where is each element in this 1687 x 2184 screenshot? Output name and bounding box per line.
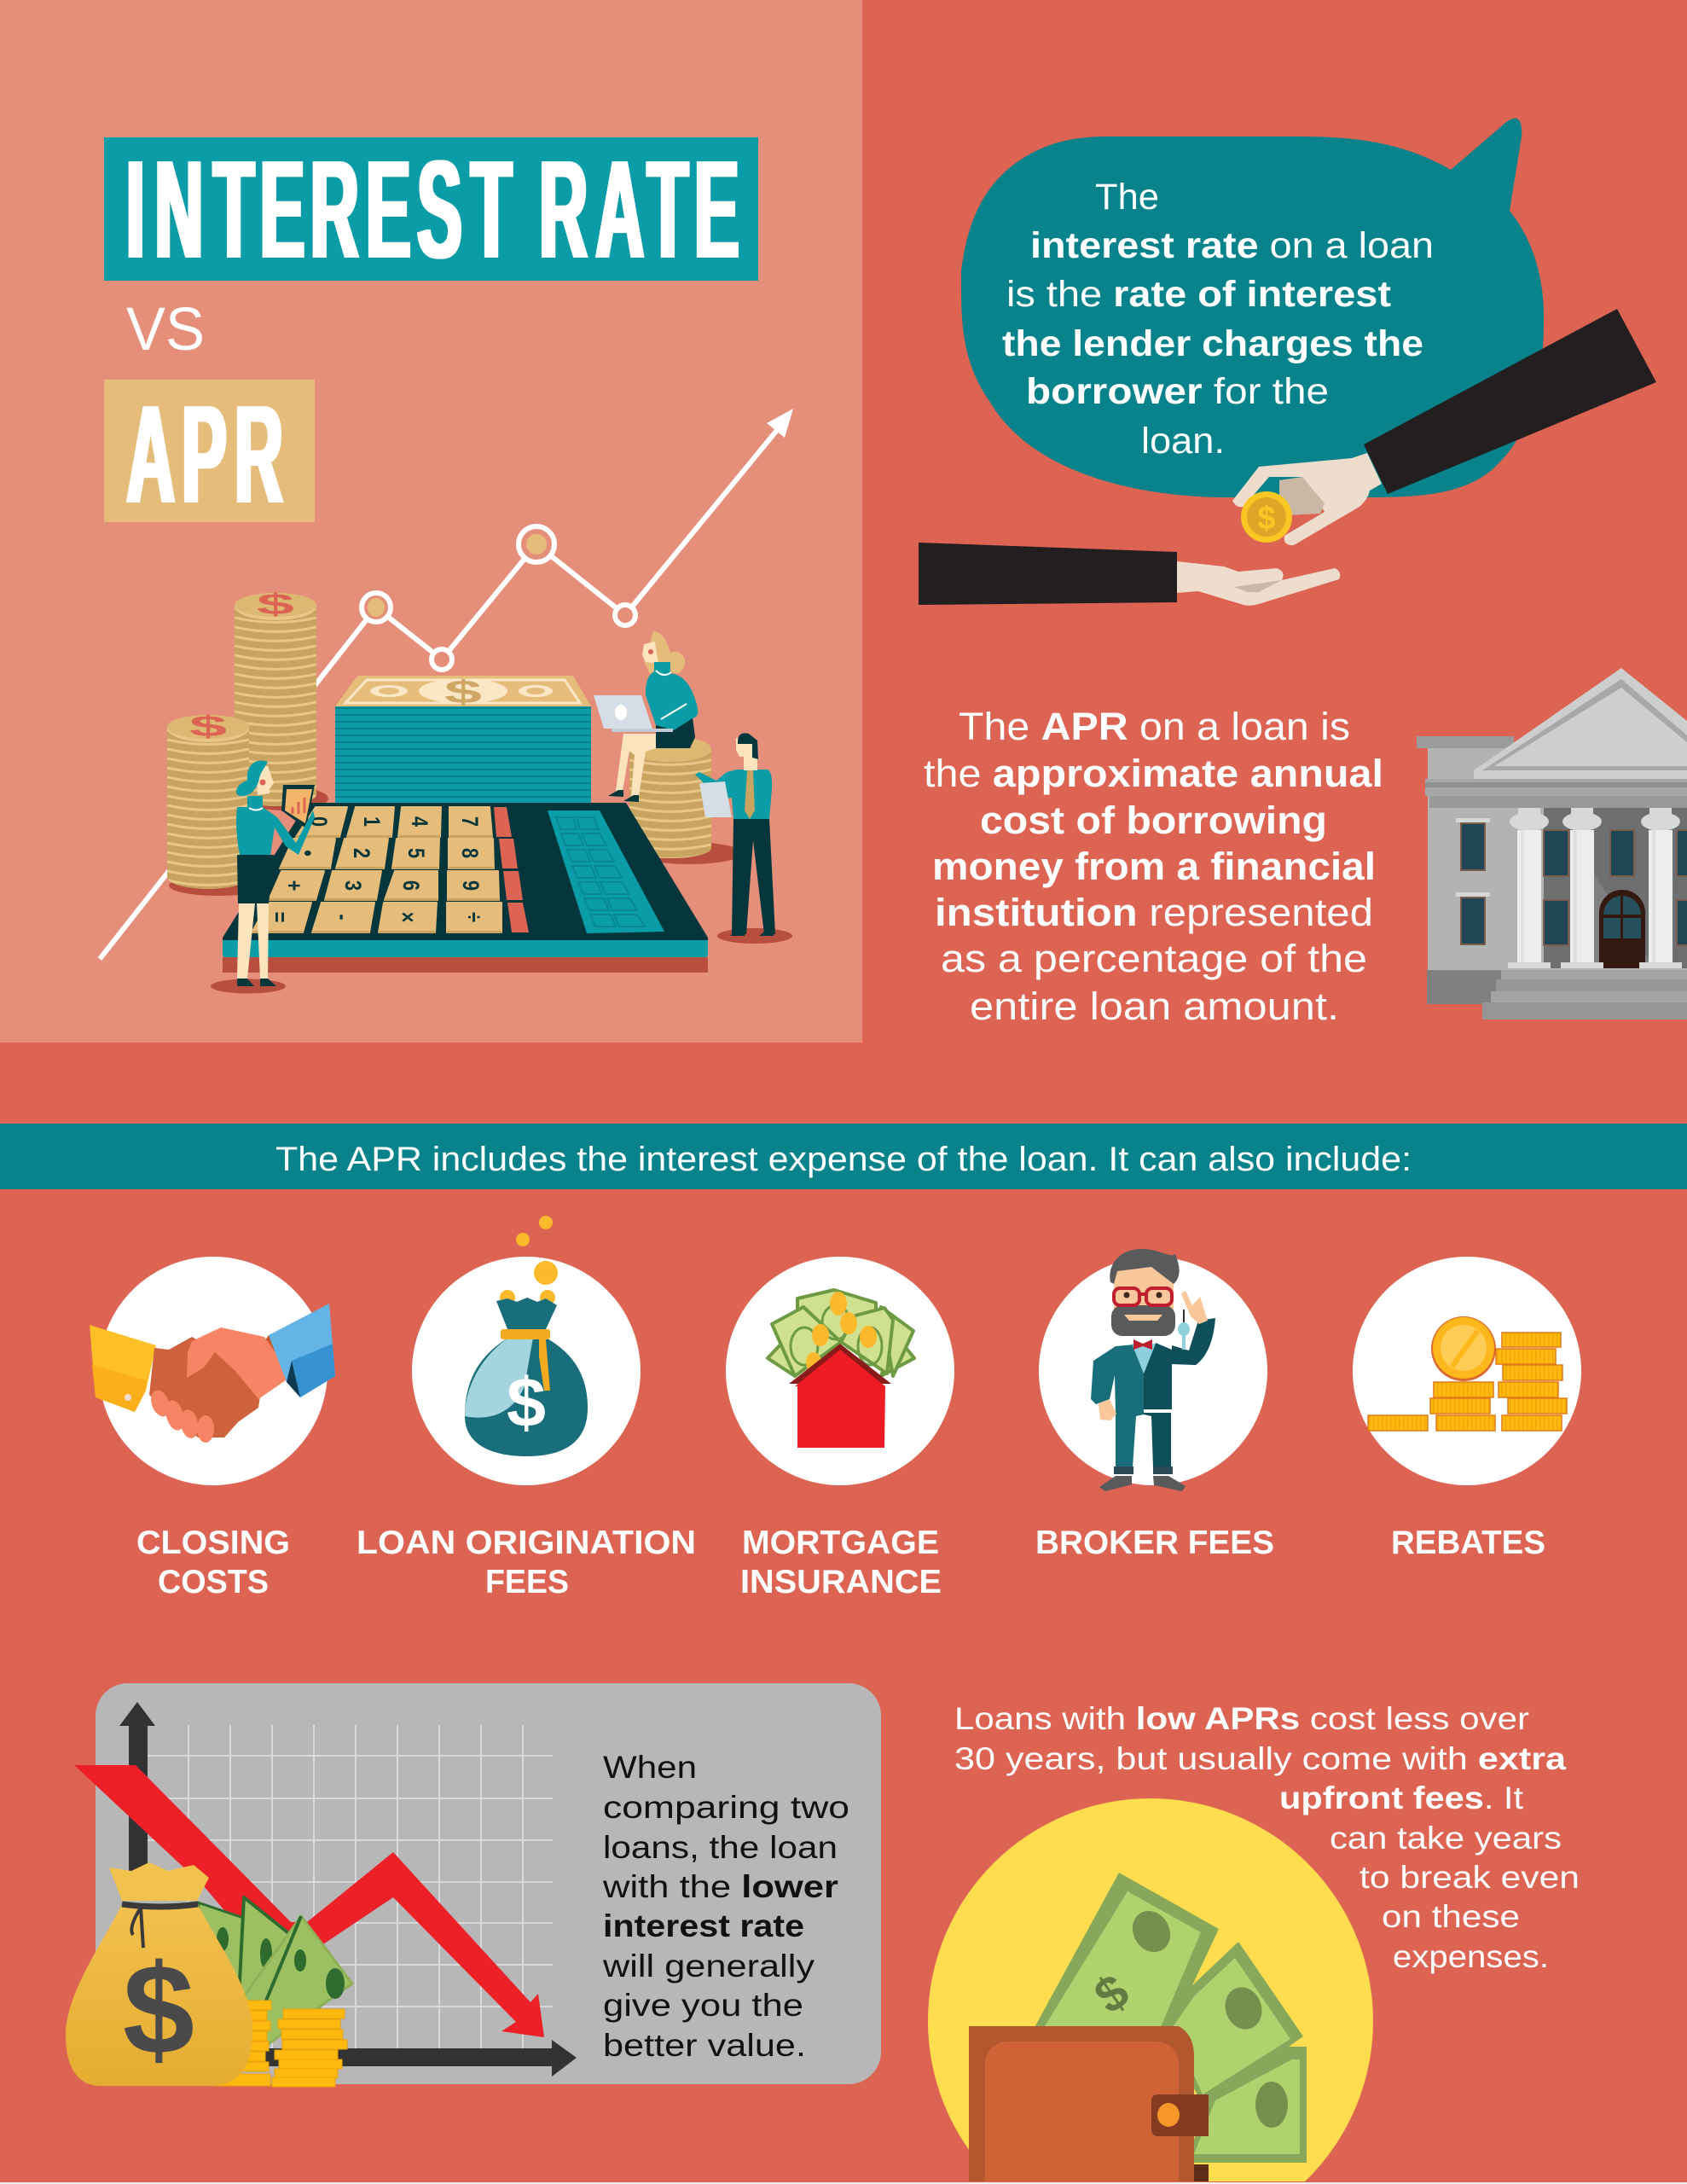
chart axes bbox=[119, 1702, 577, 2077]
title: interest rate: INTEREST RATE bbox=[126, 132, 739, 288]
calculator key labels: 9 bbox=[457, 880, 483, 891]
calculator screen bbox=[548, 810, 664, 933]
text: low aprs: to break even bbox=[1359, 1860, 1580, 1895]
text: interest rate definition: the lender charges the bbox=[1002, 323, 1423, 364]
speech bubble bbox=[961, 119, 1544, 497]
coin stack: tall bbox=[235, 589, 328, 810]
calculator key labels: 4 bbox=[406, 816, 432, 827]
calculator function keys bbox=[494, 807, 529, 932]
calculator key labels: 8 bbox=[456, 848, 482, 858]
person: man with tablet bbox=[695, 733, 792, 944]
icon: handshake bbox=[90, 1304, 335, 1443]
coin stack: short bbox=[167, 711, 268, 896]
illustration: wallet with cash bbox=[928, 1798, 1373, 2184]
bank columns bbox=[1508, 808, 1682, 968]
text: interest rate definition: interest rate on a loan bbox=[1030, 225, 1434, 266]
text: low aprs: upfront fees . It bbox=[1279, 1780, 1524, 1815]
panel: title and illustration bbox=[0, 0, 862, 1043]
label bbox=[740, 1525, 942, 1600]
cash: second bill bbox=[1174, 1942, 1303, 2095]
calculator key labels: • bbox=[294, 850, 320, 857]
text: comparing loans: loans, the loan bbox=[603, 1830, 838, 1865]
title: vs: VS bbox=[126, 296, 205, 363]
text: apr definition: entire loan amount. bbox=[970, 985, 1339, 1028]
stack of bank notes bbox=[335, 675, 591, 804]
label: REBATES bbox=[1391, 1525, 1545, 1561]
coin bbox=[1241, 491, 1292, 543]
calculator key labels: 7 bbox=[456, 816, 482, 827]
text: comparing loans: will generally bbox=[602, 1949, 815, 1984]
coin: $ bbox=[1257, 501, 1276, 537]
text: apr definition: institution represented bbox=[935, 891, 1373, 934]
item: loan origination fees bbox=[357, 1216, 696, 1600]
tablet bbox=[281, 785, 315, 828]
calculator bbox=[223, 803, 708, 973]
text: comparing loans bbox=[602, 1750, 849, 2063]
bank door bbox=[1599, 890, 1645, 968]
text: low aprs: can take years bbox=[1330, 1821, 1562, 1856]
icon: house with money bbox=[768, 1290, 914, 1448]
calculator key labels: + bbox=[281, 880, 306, 891]
icon: money bag: $ bbox=[507, 1364, 546, 1442]
text: interest rate definition: borrower for the bbox=[1026, 371, 1329, 412]
icon: gold money bag: $ bbox=[123, 1937, 194, 2081]
cash: front bill bbox=[1035, 1873, 1219, 2026]
text: apr definition: as a percentage of the bbox=[941, 937, 1367, 980]
label: MORTGAGE bbox=[742, 1525, 939, 1561]
chart grid bbox=[147, 1725, 553, 2048]
calculator key labels: 2 bbox=[348, 848, 374, 858]
left sleeve bbox=[919, 543, 1177, 605]
icon: fan of bills bbox=[198, 1897, 352, 2048]
giving hand bbox=[1232, 453, 1382, 545]
calculator key labels bbox=[266, 816, 486, 922]
laptop bbox=[594, 695, 673, 732]
text: low aprs bbox=[954, 1701, 1580, 1974]
icon: money bag bbox=[465, 1216, 588, 1456]
calculator key labels: 6 bbox=[397, 880, 423, 891]
band: apr includes: The APR includes the interest expense of the loan. It can also include: bbox=[275, 1141, 1412, 1178]
coin stack: short: $ bbox=[189, 711, 227, 743]
calculator keys bbox=[252, 807, 501, 932]
chart falling arrow bbox=[74, 1765, 544, 2037]
coin stack: right bbox=[629, 736, 742, 864]
illustration: bank building bbox=[1417, 668, 1687, 1019]
text: low aprs: 30 years, but usually come with extra bbox=[954, 1741, 1566, 1776]
item: closing costs bbox=[90, 1257, 335, 1600]
panel: comparing two loans bbox=[66, 1683, 881, 2087]
label: INSURANCE bbox=[740, 1564, 942, 1600]
label: FEES bbox=[485, 1564, 569, 1600]
icon: broker with key bbox=[1091, 1249, 1215, 1491]
label bbox=[136, 1525, 290, 1600]
text: interest rate definition bbox=[1002, 177, 1434, 462]
text: interest rate definition: loan. bbox=[1141, 421, 1225, 462]
line chart arrow bbox=[100, 409, 793, 959]
band: apr includes bbox=[0, 1124, 1687, 1189]
calculator key labels: 5 bbox=[403, 848, 428, 858]
bank windows bbox=[1461, 823, 1687, 945]
cash: third bill bbox=[1189, 2047, 1307, 2163]
calculator key labels: - bbox=[329, 914, 355, 921]
text: comparing loans: interest rate bbox=[603, 1908, 804, 1943]
label: COSTS bbox=[158, 1564, 269, 1600]
calculator key shadows bbox=[252, 835, 501, 933]
text: comparing loans: comparing two bbox=[603, 1790, 849, 1825]
folded fingers bbox=[1279, 477, 1325, 515]
illustration: hands passing a coin bbox=[919, 309, 1656, 606]
bank steps bbox=[1427, 970, 1687, 1019]
calculator key labels: 1 bbox=[358, 816, 384, 827]
item: rebates bbox=[1353, 1257, 1581, 1561]
text: apr definition bbox=[924, 705, 1383, 1028]
wallet body bbox=[969, 2026, 1209, 2184]
text: interest rate definition: is the rate of interest bbox=[1006, 274, 1391, 315]
item: mortgage insurance bbox=[726, 1257, 954, 1600]
text: low aprs: expenses. bbox=[1393, 1939, 1549, 1974]
icon: gold money bag bbox=[66, 1862, 252, 2086]
calculator key labels: × bbox=[394, 912, 420, 922]
label: BROKER FEES bbox=[1035, 1525, 1274, 1561]
icon: gold coins bbox=[214, 2001, 347, 2087]
text: low aprs: Loans with low APRs cost less over bbox=[954, 1701, 1529, 1736]
calculator key labels: ÷ bbox=[461, 912, 486, 922]
person: woman with laptop bbox=[594, 631, 698, 802]
text: comparing loans: give you the bbox=[603, 1988, 803, 2023]
text: apr definition: the approximate annual bbox=[924, 752, 1383, 795]
text: apr definition: money from a financial bbox=[932, 845, 1376, 888]
text: comparing loans: When bbox=[603, 1750, 697, 1785]
item: broker fees bbox=[1035, 1249, 1274, 1561]
text: comparing loans: better value. bbox=[603, 2028, 806, 2063]
receiving hand bbox=[1177, 561, 1340, 606]
label bbox=[357, 1525, 696, 1600]
text: apr definition: The APR on a loan is bbox=[959, 705, 1350, 748]
text: interest rate definition: The bbox=[1095, 177, 1159, 218]
text: comparing loans: with the lower bbox=[602, 1869, 838, 1904]
title: apr: APR bbox=[126, 377, 283, 533]
cash: front bill: $ bbox=[1085, 1963, 1139, 2024]
right sleeve bbox=[1364, 309, 1656, 494]
icon: coin stacks bbox=[1368, 1316, 1567, 1431]
calculator key labels: = bbox=[266, 912, 292, 922]
coin stack: tall: $ bbox=[257, 589, 294, 621]
label: LOAN ORIGINATION bbox=[357, 1525, 696, 1561]
person: woman with tablet bbox=[211, 760, 315, 993]
label: CLOSING bbox=[136, 1525, 290, 1561]
stack of bank notes: $ bbox=[444, 675, 482, 711]
text: apr definition: cost of borrowing bbox=[980, 799, 1327, 842]
calculator key labels: 3 bbox=[339, 880, 365, 891]
calculator key labels: 0 bbox=[305, 816, 331, 827]
text: low aprs: on these bbox=[1382, 1899, 1520, 1934]
